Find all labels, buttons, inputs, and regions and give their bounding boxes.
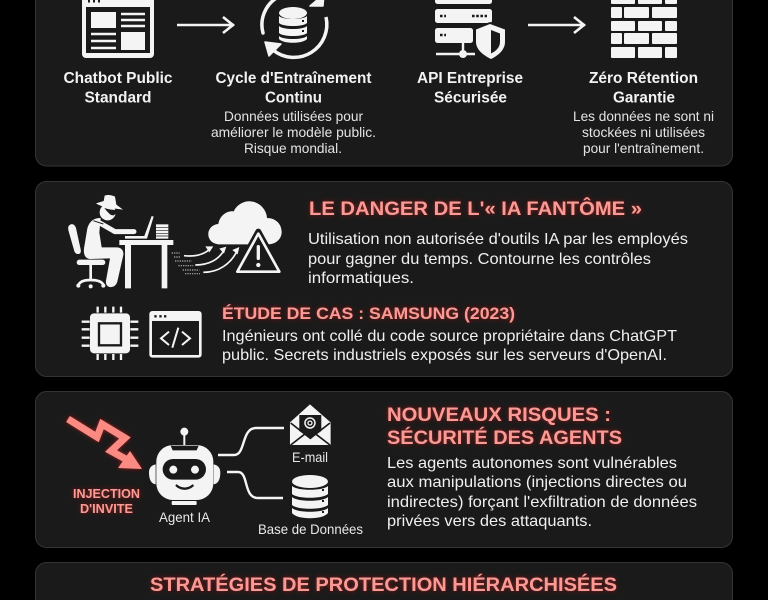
heading line: Sécurisée: Sécurisée <box>434 90 507 106</box>
text: zero retention description: Les données ne sont ni <box>573 108 714 124</box>
heading line: Continu: Continu <box>265 90 322 106</box>
text: zero retention description: stockées ni utilisées <box>582 124 705 140</box>
text: Samsung case description: Ingénieurs ont collé du code source propriétaire dans ChatGPT <box>222 328 677 345</box>
text: Samsung case description: public. Secrets industriels exposés sur les serveurs d'OpenAI. <box>222 347 667 364</box>
connectors: agent to email and database <box>218 428 284 498</box>
icon: email envelope <box>290 404 331 445</box>
text: agent risks description: indirectes) forçant l'exfiltration de données <box>387 494 697 511</box>
text: agent risks description <box>387 455 697 530</box>
icon: database <box>292 475 328 518</box>
heading: Cycle d'Entraînement: Cycle d'Entraînement <box>216 70 372 87</box>
text: zero retention description: pour l'entraînement. <box>583 140 704 156</box>
heading: protection strategies: STRATÉGIES DE PROTECTION HIÉRARCHISÉES <box>150 574 617 596</box>
text: shadow AI description <box>308 231 688 287</box>
heading: new risks: NOUVEAUX RISQUES : <box>387 405 611 426</box>
heading: Samsung case study: ÉTUDE DE CAS : SAMSUNG (2023) <box>222 304 515 323</box>
text: training cycle description <box>211 108 376 156</box>
icon: database training cycle <box>262 0 327 57</box>
text: shadow AI description: pour gagner du temps. Contourne les contrôles <box>308 251 651 268</box>
icon: prompt injection lightning arrow <box>68 419 142 469</box>
heading line: Garantie: Garantie <box>613 90 675 106</box>
text: agent risks description: Les agents autonomes sont vulnérables <box>387 455 677 472</box>
heading: shadow AI: LE DANGER DE L'« IA FANTÔME » <box>309 198 642 220</box>
heading: new risks: SÉCURITÉ DES AGENTS <box>387 427 622 449</box>
label: prompt injection: INJECTION <box>73 486 140 501</box>
heading line: Standard: Standard <box>84 90 152 106</box>
icon: browser window <box>82 0 154 58</box>
text: training cycle description: Données utilisées pour <box>224 108 363 124</box>
label: prompt injection: D'INVITE <box>80 501 133 516</box>
text: Samsung case description <box>222 328 677 364</box>
icon: secure server with shield <box>435 0 507 61</box>
text: zero retention description <box>573 108 714 156</box>
icon: data flowing to cloud <box>172 201 282 274</box>
label: prompt injection <box>73 486 140 516</box>
panel: protection strategies <box>36 562 732 600</box>
text: shadow AI description: Utilisation non autorisée d'outils IA par les employés <box>308 231 688 248</box>
text: shadow AI description: informatiques. <box>308 270 414 287</box>
icon: hooded employee at desk <box>68 195 173 288</box>
label: Agent IA: Agent IA <box>159 509 211 525</box>
text: training cycle description: Risque mondial. <box>244 140 342 156</box>
panel: agent security <box>36 392 732 548</box>
icon: robot agent <box>149 428 220 505</box>
text: training cycle description: améliorer le modèle public. <box>211 124 376 140</box>
heading: Zéro Rétention: Zéro Rétention <box>589 70 698 87</box>
label: Base de Données: Base de Données <box>258 521 363 537</box>
heading: API Entreprise: API Entreprise <box>417 70 523 87</box>
heading: Chatbot Public: Chatbot Public <box>64 70 173 87</box>
arrow: API to zero retention <box>528 17 585 33</box>
heading: new risks <box>387 405 622 449</box>
label: E-mail: E-mail <box>292 449 328 465</box>
text: agent risks description: aux manipulations (injections directes ou <box>387 474 687 491</box>
panel: shadow AI <box>36 182 732 376</box>
icon: processor chip <box>82 307 138 360</box>
text: agent risks description: privées vers des attaquants. <box>387 513 592 530</box>
arrow: chatbot to training cycle <box>177 17 234 33</box>
icon: source code window <box>149 311 202 358</box>
icon: brick wall <box>611 0 677 58</box>
panel: chatbot public vs API entreprise <box>36 0 732 166</box>
